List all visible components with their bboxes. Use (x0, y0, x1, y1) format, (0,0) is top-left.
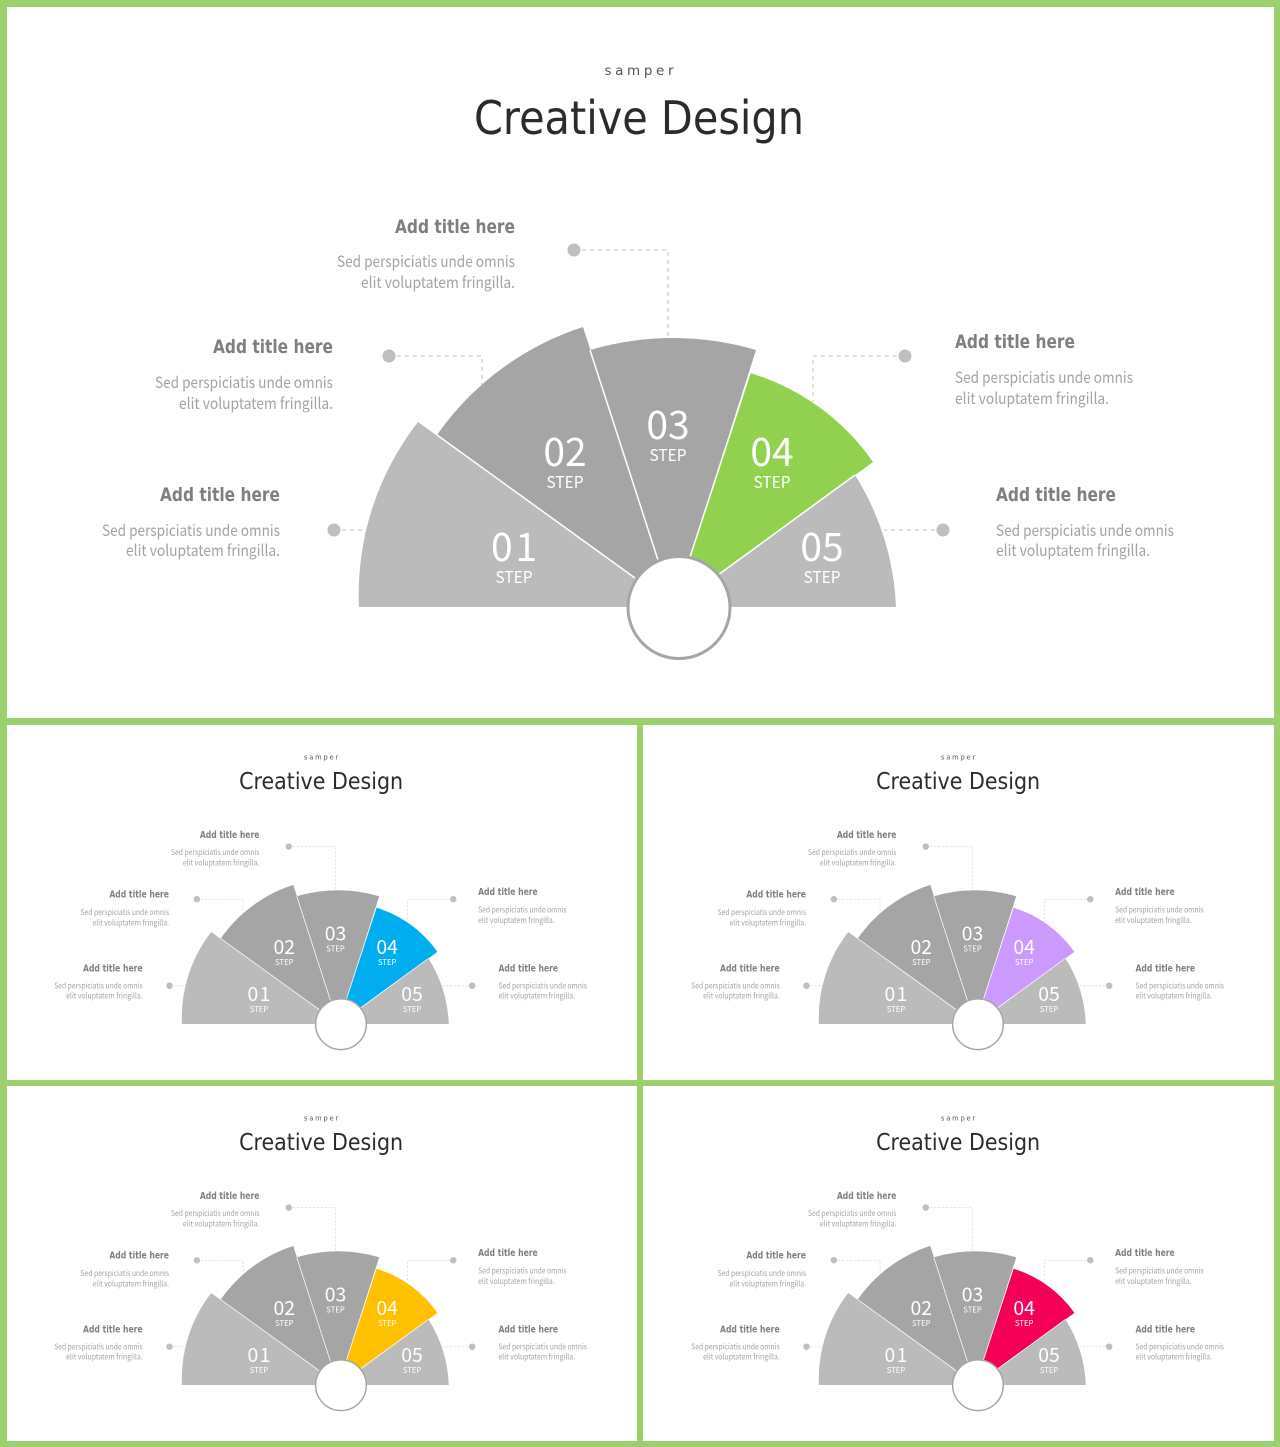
panel: small slide blue: elit voluptatem fringilla. (92, 918, 169, 929)
panel: small slide magenta: 02 (911, 1293, 932, 1321)
panel: small slide amber (7, 1086, 637, 1441)
panel: small slide magenta: elit voluptatem fringilla. (820, 1218, 896, 1229)
panel: small slide magenta: STEP (1015, 1317, 1033, 1329)
panel: small slide blue: Sed perspiciatis unde omnis (54, 981, 143, 992)
panel: small slide magenta: elit voluptatem fringilla. (1115, 1276, 1192, 1287)
sector 04 purple (983, 908, 1074, 1016)
panel: small slide blue: 05 (401, 979, 423, 1007)
panel: small slide amber: STEP (326, 1303, 345, 1315)
panel: small slide blue: Add title here (478, 887, 538, 898)
panel: small slide purple: elit voluptatem fringilla. (729, 918, 806, 929)
panel: small slide blue (7, 725, 637, 1080)
panel: small slide purple: 01 (885, 979, 907, 1007)
callout: step 03 text: Add title here (395, 216, 515, 238)
panel: small slide magenta: Sed perspiciatis unde omnis (691, 1342, 780, 1353)
panel: small slide blue: samper (304, 754, 338, 762)
panel: small slide magenta: 04 (1013, 1293, 1035, 1321)
panel: small slide magenta: 01 (885, 1340, 907, 1368)
panel: small slide blue: Add title here (83, 963, 143, 974)
panel: small slide magenta: Add title here (1115, 1248, 1175, 1259)
sector 01 (359, 422, 645, 607)
panel: small slide purple (643, 725, 1274, 1080)
panel: small slide amber: Add title here (478, 1248, 538, 1259)
panel: small slide blue: Add title here (200, 830, 259, 841)
panel: small slide magenta: STEP (963, 1303, 982, 1315)
panel: small slide amber: Sed perspiciatis unde omnis (171, 1208, 260, 1219)
panel: small slide blue: STEP (378, 956, 396, 968)
panel: small slide amber: Sed perspiciatis unde omnis (81, 1268, 169, 1279)
panel: small slide purple: Sed perspiciatis unde omnis (691, 981, 780, 992)
step labels: 02 (543, 422, 587, 478)
step labels: STEP (754, 469, 790, 493)
panel: small slide amber: STEP (403, 1364, 421, 1376)
title: Creative Design (474, 91, 804, 145)
panel: small slide magenta: elit voluptatem fringilla. (729, 1279, 806, 1290)
callout: step 02 text: Add title here (213, 336, 333, 358)
panel: small slide blue: 01 (248, 979, 270, 1007)
panel: small slide purple: 04 (1013, 932, 1035, 960)
panel: small slide magenta: Add title here (837, 1191, 896, 1202)
callout: step 05 text: Add title here (996, 484, 1116, 506)
panel: small slide amber: elit voluptatem fringilla. (478, 1276, 555, 1287)
panel: small slide magenta: samper (941, 1115, 975, 1123)
step labels: STEP (546, 469, 584, 493)
callout: step 04 text (955, 331, 1133, 409)
panel: small slide blue: Add title here (499, 963, 558, 974)
panel: small slide magenta: Creative Design (876, 1130, 1040, 1156)
panel: small slide amber: 05 (401, 1340, 423, 1368)
callout: step 01 text (102, 484, 280, 561)
panel: small slide purple: 02 (911, 932, 932, 960)
panel: small slide magenta: Sed perspiciatis unde omnis (718, 1268, 806, 1279)
panel: small slide amber: elit voluptatem fringilla. (499, 1352, 575, 1363)
panel: small slide magenta (643, 1086, 1274, 1441)
panel: small slide blue: elit voluptatem fringilla. (499, 991, 575, 1002)
panel: small slide blue: STEP (326, 942, 345, 954)
panel: small slide blue: Sed perspiciatis unde omnis (81, 907, 169, 918)
panel: small slide blue: elit voluptatem fringilla. (478, 915, 555, 926)
step labels: 05 (800, 517, 844, 573)
sector 04 blue (346, 908, 437, 1016)
step labels: 04 (750, 422, 794, 478)
step labels: STEP (804, 564, 840, 588)
panel: small slide amber: Add title here (83, 1324, 143, 1335)
callout: step 04 text: elit voluptatem fringilla. (955, 387, 1109, 409)
panel: small slide magenta: Add title here (720, 1324, 780, 1335)
leader lines and dots (328, 244, 950, 536)
panel: small slide purple: STEP (887, 1003, 905, 1015)
panel: small slide purple: Creative Design (876, 769, 1040, 795)
panel: small slide purple: STEP (963, 942, 982, 954)
panel: small slide purple: Add title here (837, 830, 896, 841)
callout: step 02 text: elit voluptatem fringilla. (179, 392, 333, 414)
hub circle (628, 556, 730, 658)
panel: small slide amber: elit voluptatem fringilla. (92, 1279, 169, 1290)
panel: small slide magenta: STEP (912, 1317, 930, 1329)
panel: small slide blue: Creative Design (239, 769, 403, 795)
panel: small slide blue: STEP (250, 1003, 268, 1015)
panel: small slide amber: elit voluptatem fringilla. (183, 1218, 259, 1229)
panel: small slide blue: Add title here (109, 890, 169, 901)
callout: step 04 text: Sed perspiciatis unde omnis (955, 366, 1133, 388)
panel: small slide purple: samper (941, 754, 975, 762)
sector 04 highlighted (690, 373, 873, 590)
eyebrow: samper (604, 63, 674, 79)
panel: small slide magenta: 03 (962, 1279, 983, 1307)
sector 05 (700, 475, 896, 607)
callout: step 01 text: elit voluptatem fringilla. (126, 539, 280, 561)
panel: small slide purple: Sed perspiciatis unde omnis (808, 847, 897, 858)
callout: step 03 text (337, 216, 515, 293)
callout: step 03 text: Sed perspiciatis unde omnis (337, 250, 515, 272)
panel: small slide purple: 05 (1038, 979, 1060, 1007)
panel: small slide purple: Sed perspiciatis unde omnis (1136, 981, 1224, 992)
panel: small slide magenta: Sed perspiciatis unde omnis (808, 1208, 897, 1219)
panel: small slide blue: Sed perspiciatis unde omnis (171, 847, 260, 858)
panel: small slide amber: 02 (274, 1293, 295, 1321)
panel: small slide purple: elit voluptatem fringilla. (820, 857, 896, 868)
panel: small slide amber: Sed perspiciatis unde omnis (478, 1266, 567, 1277)
callout: step 02 text: Sed perspiciatis unde omnis (155, 371, 333, 393)
sector 03 (590, 338, 756, 590)
panel: small slide purple: Add title here (746, 890, 806, 901)
step labels: 03 (646, 395, 690, 451)
panel: small slide magenta: Add title here (746, 1251, 806, 1262)
panel: small slide magenta: Sed perspiciatis unde omnis (1136, 1342, 1224, 1353)
panel: main slide green (7, 7, 1274, 718)
callout: step 05 text: elit voluptatem fringilla. (996, 539, 1150, 561)
panel: small slide purple: Sed perspiciatis unde omnis (1115, 905, 1204, 916)
step labels: STEP (496, 564, 532, 588)
callout: step 03 text: elit voluptatem fringilla. (361, 271, 515, 293)
panel: small slide blue: 03 (325, 918, 346, 946)
panel: small slide purple: Add title here (1136, 963, 1195, 974)
callout: step 05 text (996, 484, 1174, 561)
panel: small slide blue: STEP (275, 956, 293, 968)
step labels: 01 (491, 517, 537, 573)
panel: small slide blue: 02 (274, 932, 295, 960)
callout: step 01 text: Sed perspiciatis unde omnis (102, 519, 280, 541)
panel: small slide purple: STEP (1040, 1003, 1058, 1015)
panel: small slide blue: 04 (376, 932, 398, 960)
panel: small slide amber: STEP (250, 1364, 268, 1376)
panel: small slide amber: 03 (325, 1279, 346, 1307)
sector 04 magenta (983, 1269, 1074, 1377)
panel: small slide amber: STEP (275, 1317, 293, 1329)
panel: small slide amber: STEP (378, 1317, 396, 1329)
panel: small slide amber: Add title here (499, 1324, 558, 1335)
panel: small slide magenta: Add title here (1136, 1324, 1195, 1335)
callout: step 04 text: Add title here (955, 331, 1075, 353)
panel: small slide amber: 04 (376, 1293, 398, 1321)
panel: small slide amber: Creative Design (239, 1130, 403, 1156)
panel: small slide purple: Add title here (720, 963, 780, 974)
panel: small slide blue: STEP (403, 1003, 421, 1015)
panel: small slide purple: 03 (962, 918, 983, 946)
panel: small slide magenta: STEP (1040, 1364, 1058, 1376)
sector 04 amber (346, 1269, 437, 1377)
panel: small slide amber: Sed perspiciatis unde omnis (54, 1342, 143, 1353)
panel: small slide amber: 01 (248, 1340, 270, 1368)
step labels (491, 395, 844, 588)
callout: step 05 text: Sed perspiciatis unde omnis (996, 519, 1174, 541)
panel: small slide purple: STEP (912, 956, 930, 968)
panel: small slide purple: Sed perspiciatis unde omnis (718, 907, 806, 918)
panel: small slide blue: Sed perspiciatis unde omnis (478, 905, 567, 916)
panel: small slide purple: elit voluptatem fringilla. (1115, 915, 1192, 926)
callout: step 01 text: Add title here (160, 484, 280, 506)
panel: small slide purple: STEP (1015, 956, 1033, 968)
panel: small slide blue: Sed perspiciatis unde omnis (499, 981, 587, 992)
panel: small slide magenta: STEP (887, 1364, 905, 1376)
panel: small slide amber: Sed perspiciatis unde omnis (499, 1342, 587, 1353)
panel: small slide blue: elit voluptatem fringilla. (66, 991, 143, 1002)
panel: small slide magenta: elit voluptatem fringilla. (703, 1352, 780, 1363)
callout: step 02 text (155, 336, 333, 414)
panel: small slide purple: elit voluptatem fringilla. (703, 991, 780, 1002)
step labels: STEP (650, 442, 686, 466)
sector 02 (437, 327, 660, 590)
panel: small slide purple: Add title here (1115, 887, 1175, 898)
panel: small slide magenta: Sed perspiciatis unde omnis (1115, 1266, 1204, 1277)
panel: small slide amber: Add title here (109, 1251, 169, 1262)
panel: small slide purple: elit voluptatem fringilla. (1136, 991, 1212, 1002)
panel: small slide amber: elit voluptatem fringilla. (66, 1352, 143, 1363)
panel: small slide magenta: 05 (1038, 1340, 1060, 1368)
panel: small slide amber: Add title here (200, 1191, 259, 1202)
panel: small slide amber: samper (304, 1115, 338, 1123)
panel: small slide blue: elit voluptatem fringilla. (183, 857, 259, 868)
panel: small slide magenta: elit voluptatem fringilla. (1136, 1352, 1212, 1363)
